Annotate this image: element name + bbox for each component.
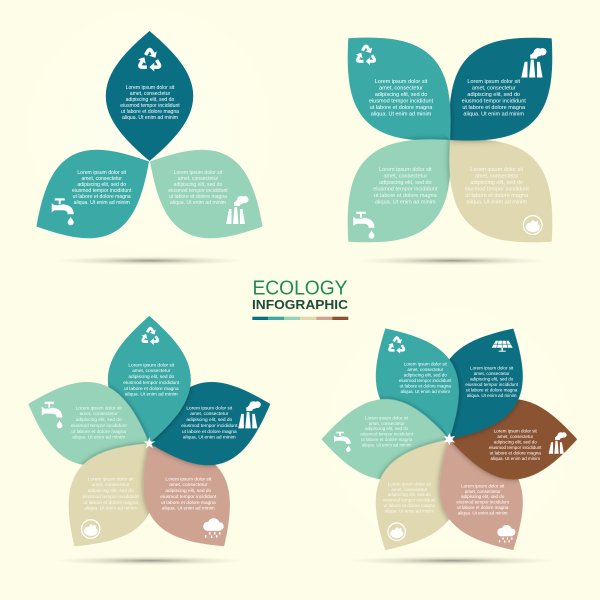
leaf: globe: Lorem ipsum dolor sit <box>88 476 134 482</box>
leaf: factory, brown <box>449 399 577 480</box>
leaf overlap and content: recycling: eiusmod tempor incididunt <box>399 378 452 383</box>
leaf: water: ut labore et dolore magna <box>71 429 126 435</box>
leaf: factory <box>446 38 552 144</box>
leaf overlap and content: recycling: Lorem ipsum dolor sit <box>375 79 428 85</box>
leaf overlap and content: recycling: eiusmod tempor incididunt <box>123 380 180 386</box>
leaf: rain: Lorem ipsum dolor sit <box>461 483 505 488</box>
leaf: globe <box>446 139 552 242</box>
panel: three-leaf diagram <box>15 31 284 264</box>
leaf: water: amet, consectetur <box>369 421 405 426</box>
leaf: recycling: adipiscing elit, sed do <box>126 97 175 103</box>
leaf: water: Lorem ipsum dolor sit <box>365 415 409 420</box>
leaf overlap and content: recycling: Lorem ipsum dolor sit <box>404 362 448 367</box>
leaf: factory: aliqua. Ut enim ad minim <box>183 435 236 441</box>
leaf: water <box>28 382 149 466</box>
leaf: water: Lorem ipsum dolor sit <box>77 170 127 176</box>
leaf: water: eiusmod tempor incididunt <box>72 188 132 194</box>
leaf: recycling: aliqua. Ut enim ad minim <box>122 115 178 121</box>
title <box>252 277 348 320</box>
leaf: globe: ut labore et dolore magna <box>83 500 138 506</box>
leaf: factory, brown: amet, consectetur <box>497 434 534 439</box>
leaf: solar panel: eiusmod tempor incididunt <box>465 382 519 387</box>
leaf overlap and content: recycling: Lorem ipsum dolor sit <box>128 362 175 368</box>
leaf: globe <box>68 440 150 546</box>
leaf overlap and content: recycling <box>123 316 193 442</box>
leaf: water: Lorem ipsum dolor sit <box>76 405 122 411</box>
panel: six-leaf diagram <box>321 328 578 550</box>
leaf: factory: adipiscing elit, sed do <box>186 417 233 423</box>
leaf: factory: ut labore et dolore magna <box>182 429 237 435</box>
leaf overlap and content: recycling: eiusmod tempor incididunt <box>369 99 434 105</box>
leaf shape: recycling <box>348 38 452 142</box>
leaf: water: aliqua. Ut enim ad minim <box>362 443 412 448</box>
leaf: solar panel: aliqua. Ut enim ad minim <box>467 393 517 398</box>
leaf: rain: eiusmod tempor incididunt <box>456 500 510 505</box>
leaf: factory, brown: eiusmod tempor incididunt <box>489 445 542 450</box>
leaf: rain: eiusmod tempor incididunt <box>160 494 217 500</box>
leaf: water <box>348 136 452 242</box>
leaf: water: aliqua. Ut enim ad minim <box>375 200 436 206</box>
leaf: factory: eiusmod tempor incididunt <box>181 423 238 429</box>
heading: ecology: ECOLOGY <box>252 277 348 299</box>
leaf: water: aliqua. Ut enim ad minim <box>74 200 130 206</box>
leaf: water: adipiscing elit, sed do <box>76 417 122 423</box>
leaf: solar panel: adipiscing elit, sed do <box>470 377 514 382</box>
leaf: water: ut labore et dolore magna <box>374 193 438 199</box>
leaf: water: adipiscing elit, sed do <box>365 426 409 431</box>
leaf: factory: Lorem ipsum dolor sit <box>174 170 223 176</box>
leaf: water <box>321 399 449 480</box>
leaf: globe: amet, consectetur <box>92 482 130 488</box>
leaf: rain: adipiscing elit, sed do <box>165 488 212 494</box>
leaf overlap and content: recycling: amet, consectetur <box>379 86 423 92</box>
leaf: factory: adipiscing elit, sed do <box>467 92 520 98</box>
leaf: rain <box>436 442 523 550</box>
leaf: water: Lorem ipsum dolor sit <box>379 167 432 173</box>
leaf: globe: adipiscing elit, sed do <box>470 180 523 186</box>
icon: solar panel <box>492 341 513 352</box>
leaf: factory: eiusmod tempor incididunt <box>168 188 228 194</box>
leaf overlap and content: recycling <box>386 328 462 436</box>
leaf overlap and content: recycling: aliqua. Ut enim ad minim <box>401 389 450 394</box>
leaf: factory: amet, consectetur <box>178 176 219 182</box>
leaf: globe: eiusmod tempor incididunt <box>383 498 436 503</box>
leaf: recycling: amet, consectetur <box>130 91 171 97</box>
leaf: factory: Lorem ipsum dolor sit <box>467 79 520 85</box>
leaf overlap and content: recycling <box>348 38 454 140</box>
leaf: factory, brown: ut labore et dolore magna <box>490 451 541 456</box>
leaf: factory: eiusmod tempor incididunt <box>462 99 526 105</box>
leaf: rain: amet, consectetur <box>169 482 208 488</box>
leaf overlap and content: recycling: aliqua. Ut enim ad minim <box>371 112 432 118</box>
leaf: water: eiusmod tempor incididunt <box>373 187 438 193</box>
leaf: water: aliqua. Ut enim ad minim <box>72 435 125 441</box>
leaf: globe: aliqua. Ut enim ad minim <box>84 506 137 512</box>
colour bar <box>252 317 348 320</box>
leaf: water: adipiscing elit, sed do <box>379 180 432 186</box>
leaf overlap and content: recycling: adipiscing elit, sed do <box>375 92 427 98</box>
leaf overlap and content: recycling: ut labore et dolore magna <box>370 105 433 111</box>
leaf: globe: aliqua. Ut enim ad minim <box>385 509 434 514</box>
leaf: solar panel <box>443 328 523 441</box>
leaf: solar panel: Lorem ipsum dolor sit <box>470 366 514 371</box>
leaf: rain: aliqua. Ut enim ad minim <box>458 511 508 516</box>
leaf: globe <box>376 437 450 550</box>
leaf: rain: ut labore et dolore magna <box>457 505 509 510</box>
leaf: factory: ut labore et dolore magna <box>462 105 526 111</box>
leaf: rain: adipiscing elit, sed do <box>461 494 505 499</box>
leaf: rain: Lorem ipsum dolor sit <box>165 476 212 482</box>
leaf: factory <box>147 382 270 469</box>
leaf: factory: aliqua. Ut enim ad minim <box>170 200 226 206</box>
leaf: water <box>15 124 171 264</box>
leaf overlap and content: recycling: amet, consectetur <box>132 368 171 374</box>
leaf: factory, brown: Lorem ipsum dolor sit <box>494 429 538 434</box>
leaf shape: recycling <box>108 316 191 443</box>
leaf: factory <box>128 124 284 264</box>
leaf: factory, brown: adipiscing elit, sed do <box>494 440 537 445</box>
leaf overlap and content: recycling: aliqua. Ut enim ad minim <box>125 392 178 398</box>
leaf overlap and content: recycling: ut labore et dolore magna <box>400 384 451 389</box>
leaf: factory: adipiscing elit, sed do <box>174 182 223 188</box>
leaf overlap and content: recycling: adipiscing elit, sed do <box>128 374 175 380</box>
leaf: recycling: eiusmod tempor incididunt <box>120 103 180 109</box>
leaf shape: recycling <box>376 328 450 437</box>
leaf: factory: aliqua. Ut enim ad minim <box>463 112 524 118</box>
leaf: water: ut labore et dolore magna <box>73 194 131 200</box>
leaf: recycling: ut labore et dolore magna <box>121 109 179 115</box>
leaf: globe: eiusmod tempor incididunt <box>465 187 529 193</box>
leaf: solar panel: amet, consectetur <box>474 371 510 376</box>
leaf: globe: Lorem ipsum dolor sit <box>470 167 523 173</box>
leaf overlap and content: recycling: adipiscing elit, sed do <box>404 373 447 378</box>
leaf: water: amet, consectetur <box>80 411 118 417</box>
leaf: globe: ut labore et dolore magna <box>384 503 435 508</box>
leaf overlap and content: recycling: ut labore et dolore magna <box>124 386 179 392</box>
centre star: five-leaf diagram <box>143 437 155 448</box>
leaf overlap and content: recycling: amet, consectetur <box>407 367 444 372</box>
leaf: factory: amet, consectetur <box>472 86 516 92</box>
leaf: rain <box>140 444 230 546</box>
leaf: factory: amet, consectetur <box>190 411 229 417</box>
leaf: globe: amet, consectetur <box>391 487 428 492</box>
panel: five-leaf diagram <box>28 316 270 546</box>
leaf: factory: Lorem ipsum dolor sit <box>186 405 233 411</box>
leaf: water: ut labore et dolore magna <box>361 437 413 442</box>
leaf: factory, brown: aliqua. Ut enim ad minim <box>491 456 540 461</box>
leaf: globe: adipiscing elit, sed do <box>88 488 134 494</box>
leaf: globe: ut labore et dolore magna <box>465 193 529 199</box>
leaf: globe: Lorem ipsum dolor sit <box>388 481 432 486</box>
leaf: globe: adipiscing elit, sed do <box>388 492 431 497</box>
heading: infographic: INFOGRAPHIC <box>252 298 348 312</box>
panel: four-leaf diagram <box>348 38 552 242</box>
leaf: rain: ut labore et dolore magna <box>161 500 216 506</box>
leaf: factory: ut labore et dolore magna <box>169 194 227 200</box>
leaf: globe: eiusmod tempor incididunt <box>83 494 139 500</box>
leaf: water: eiusmod tempor incididunt <box>71 423 127 429</box>
leaf: rain: amet, consectetur <box>465 489 501 494</box>
ground shadows <box>55 256 557 565</box>
centre star: six-leaf diagram <box>444 433 455 446</box>
leaf: recycling <box>106 31 193 161</box>
leaf: rain: aliqua. Ut enim ad minim <box>162 506 215 512</box>
leaf: globe: aliqua. Ut enim ad minim <box>466 200 527 206</box>
leaf: water: amet, consectetur <box>383 174 427 180</box>
leaf: recycling: Lorem ipsum dolor sit <box>126 85 175 91</box>
leaf: water: adipiscing elit, sed do <box>77 182 126 188</box>
leaf: water: amet, consectetur <box>81 176 122 182</box>
leaf: globe: amet, consectetur <box>475 174 519 180</box>
leaf: solar panel: ut labore et dolore magna <box>466 388 518 393</box>
leaf: water: eiusmod tempor incididunt <box>360 432 414 437</box>
